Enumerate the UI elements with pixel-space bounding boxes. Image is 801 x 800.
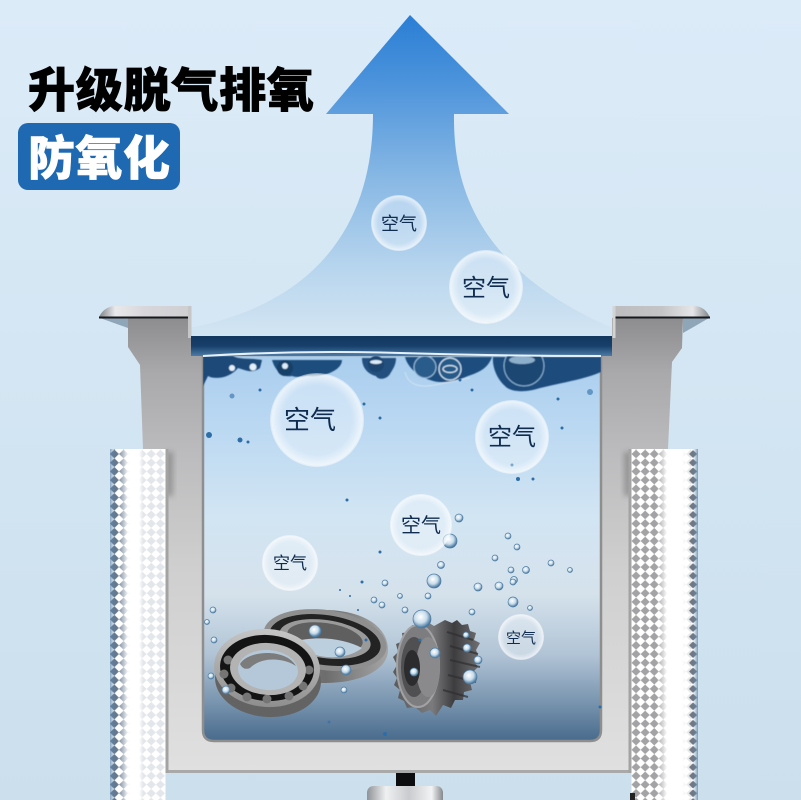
left cylinder (110, 449, 166, 800)
right rim (612, 306, 710, 338)
air bubble 1: 空气 (381, 214, 417, 234)
air bubble 3 (270, 373, 364, 467)
title: 升级脱气排氧 (28, 64, 314, 117)
water surface (203, 356, 601, 392)
air bubble 5 (390, 494, 452, 556)
back bearing (259, 602, 391, 683)
water in tank (191, 336, 612, 741)
air bubble 1 (371, 195, 427, 251)
air bubble 7 (498, 614, 544, 660)
front bearing (211, 625, 323, 721)
bearings (211, 602, 391, 721)
tank body (128, 318, 683, 773)
air bubble 6: 空气 (273, 554, 307, 573)
air bubble 4 (475, 400, 549, 474)
stand post and foot (367, 773, 443, 800)
left rim (99, 306, 192, 338)
small air droplets (204, 514, 572, 694)
badge: anti-oxidation (18, 123, 180, 190)
right cylinder (630, 449, 698, 800)
air bubble 4: 空气 (488, 424, 536, 451)
air bubble 2: 空气 (462, 275, 510, 302)
air bubble 2 (449, 250, 523, 324)
air bubble 7: 空气 (506, 630, 536, 647)
air bubble 6 (262, 535, 318, 591)
gear (393, 620, 480, 716)
air bubble 5: 空气 (401, 514, 441, 537)
air bubble 3: 空气 (284, 405, 336, 435)
arrow: air rising out of the tank (190, 15, 612, 336)
badge: anti-oxidation: 防氧化 (28, 132, 170, 185)
blue specks in water (206, 378, 602, 736)
